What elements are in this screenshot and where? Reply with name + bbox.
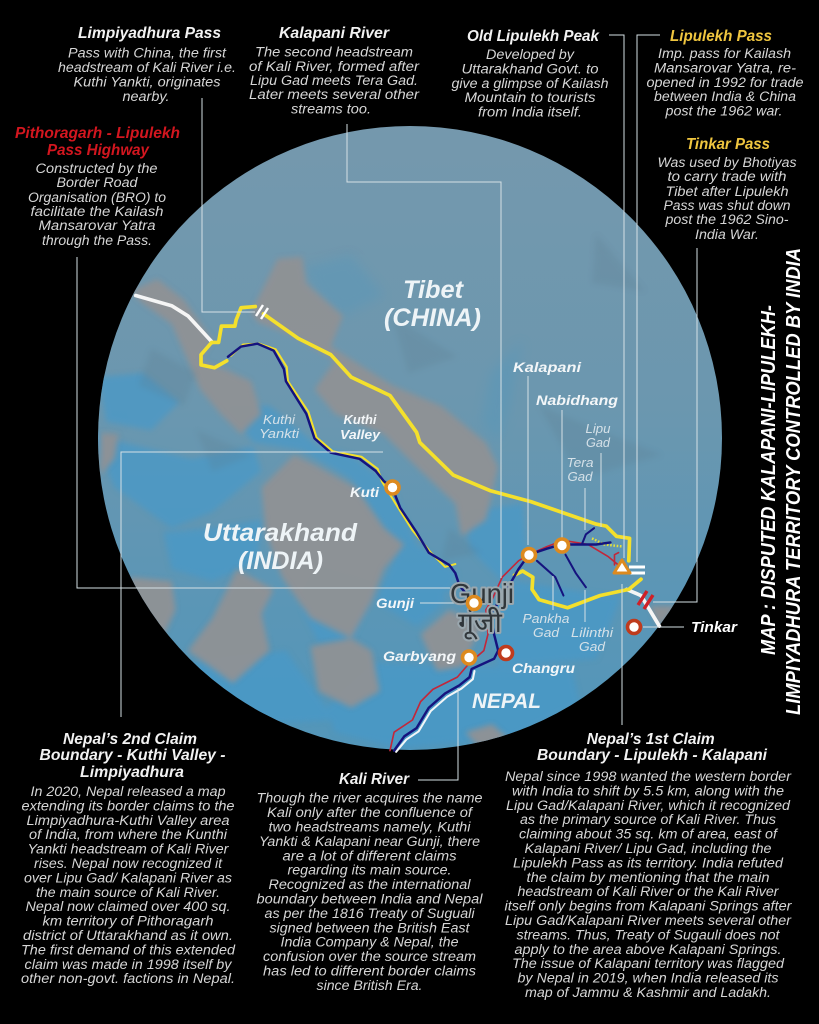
text block: Nepal's 1st claim: Lipu Gad/Kalapani River meets several other <box>505 913 792 928</box>
text block: Pithoragarh - Lipulekh Pass Highway: facilitate the Kailash <box>30 204 164 219</box>
leader: Nepal 1st claim <box>621 584 623 725</box>
text block: Nepal's 1st claim: Lipu Gad/Kalapani River, which it recognized <box>506 798 791 813</box>
text block: Lipulekh Pass: Lipulekh Pass <box>670 28 772 45</box>
text block: Nepal's 1st claim: headstream of Kali River or the Kali River <box>518 884 779 899</box>
map labels <box>203 276 738 713</box>
label: Lilinthi Gad: Lilinthi <box>571 625 614 640</box>
label: Tibet (China): Tibet <box>403 276 465 304</box>
leader: Old Lipulekh Peak <box>609 35 624 558</box>
leader: Pithoragarh highway <box>77 257 450 588</box>
text block: Nepal's 1st claim: itself only begins from Kalapani Springs after <box>504 899 792 914</box>
base map label: Gunji: गूंजी <box>458 606 503 640</box>
leader: Limpiyadhura Pass <box>202 98 255 312</box>
text block: Nepal's 1st claim: with India to shift by 5.5 km, along with the <box>512 783 784 798</box>
marker: Garbyang <box>462 651 476 664</box>
text block: Old Lipulekh Peak: give a glimpse of Kailash <box>452 76 608 91</box>
text block: Kali River: boundary between India and Nepal <box>256 892 484 906</box>
label: Kuthi Yankti: Yankti <box>259 426 300 441</box>
text block: Limpiyadhura Pass: headstream of Kali River i.e. <box>58 60 236 75</box>
label: Garbyang: Garbyang <box>383 648 456 664</box>
leader: Kali River <box>418 688 458 780</box>
text block: Nepal's 2nd claim: Limpiyadhura <box>80 764 184 781</box>
text block: Pithoragarh - Lipulekh Pass Highway: Mansarovar Yatra <box>38 218 156 233</box>
text block: Kali River: regarding its main source. <box>288 863 452 878</box>
base map label: Gunji <box>450 578 514 640</box>
text block: Kali River: has led to different border claims <box>263 964 476 978</box>
text block: Old Lipulekh Peak: Uttarakhand Govt. to <box>462 62 599 76</box>
label: Kuti: Kuti <box>350 484 380 500</box>
text block: Kali River: Though the river acquires the name <box>256 791 482 806</box>
text block: Nepal's 2nd claim: Limpiyadhura-Kuthi Valley area <box>26 813 230 828</box>
text block: Kalapani River: streams too. <box>291 102 371 116</box>
text block: Lipulekh Pass <box>646 28 804 118</box>
marker: Changru <box>500 646 512 660</box>
icon: Lipulekh pass mark <box>629 567 645 573</box>
marker: Gunji <box>468 596 480 610</box>
label: Kuthi Valley: Valley <box>340 427 381 442</box>
text block: Tinkar Pass: Tibet after Lipulekh <box>666 184 788 199</box>
text block: Nepal's 2nd claim: Nepal’s 2nd Claim <box>63 731 197 748</box>
label: Pankha Gad: Pankha <box>522 611 570 626</box>
label: Kuthi Yankti: Kuthi <box>263 412 296 427</box>
text block: Old Lipulekh Peak <box>452 28 608 120</box>
vertical title: LIMPIYADHURA TERRITORY CONTROLLED BY INDIA <box>783 248 805 715</box>
text block: Nepal's 2nd claim: other non-govt. factions in Nepal. <box>21 971 235 986</box>
text block: Nepal's 2nd claim: rises. Nepal now recognized it <box>34 856 223 871</box>
text block: Nepal's 2nd claim: In 2020, Nepal released a map <box>30 784 226 799</box>
label: Tibet (China) <box>384 276 481 332</box>
icon: Tinkar pass mark <box>638 591 653 609</box>
text block: Tinkar Pass: Pass was shut down <box>664 198 790 213</box>
text block: Lipulekh Pass: between India & China <box>654 89 797 104</box>
label: Gunji: Gunji <box>376 595 415 611</box>
text block: Nepal's 2nd claim: extending its border claims to the <box>22 798 234 813</box>
text block: Tinkar Pass: Tinkar Pass <box>686 136 770 153</box>
text block: Nepal's 2nd claim: Yankti headstream of Kali River <box>28 842 229 857</box>
highway: yellow boundary to Lipulekh <box>263 314 630 561</box>
label: Uttarakhand (India) <box>203 519 358 575</box>
text block: Old Lipulekh Peak: Developed by <box>486 47 575 62</box>
text block: Old Lipulekh Peak: Mountain to tourists <box>464 90 596 105</box>
marker: Old Lipulekh Peak <box>614 560 630 573</box>
text block: Limpiyadhura Pass: Pass with China, the first <box>68 46 227 60</box>
label: Changru: Changru <box>512 660 575 676</box>
river: Kali main stem <box>394 542 610 751</box>
leader: Lipulekh Pass <box>637 35 660 562</box>
text block: Kali River: signed between the British East <box>270 920 471 935</box>
text block: Kali River: Yankti & Kalapani near Gunji, there <box>259 834 480 849</box>
icon: Limpiyadhura pass mark <box>256 305 268 319</box>
text block: Kali River: as per the 1816 Treaty of Suguali <box>264 906 476 921</box>
label: Tinkar: Tinkar <box>691 619 738 636</box>
text block: Kalapani River: The second headstream <box>255 44 413 60</box>
text block: Nepal's 1st claim: Lipulekh Pass as its territory. India refuted <box>513 855 784 870</box>
text block: Kali River: since British Era. <box>316 978 422 993</box>
text block: Old Lipulekh Peak: Old Lipulekh Peak <box>467 28 600 45</box>
label: Lilinthi Gad <box>571 625 614 654</box>
river: red hook <box>614 553 619 565</box>
trail: dashed yellow <box>592 538 623 547</box>
text block: Pithoragarh - Lipulekh Pass Highway: Constructed by the <box>36 161 158 176</box>
label: Kuthi Valley: Kuthi <box>344 412 377 427</box>
text block: Nepal's 1st claim: Boundary - Lipulekh - Kalapani <box>537 747 768 764</box>
text block: Nepal's 1st claim: apply to the area above Kalapani Springs. <box>514 942 782 957</box>
label: Pankha Gad <box>522 611 570 640</box>
text block: Kali River: are a lot of different claims <box>282 848 457 863</box>
text block: Tinkar Pass: post the 1962 Sino- <box>664 212 789 227</box>
text block: Nepal's 2nd claim: km territory of Pithoragarh <box>42 914 213 929</box>
river: Pankha Gad <box>537 561 563 596</box>
vertical title <box>758 248 805 715</box>
text block: Pithoragarh - Lipulekh Pass Highway: Border Road <box>56 175 138 190</box>
leader: Nabidhang <box>561 410 563 538</box>
text block: Nepal's 1st claim: Nepal’s 1st Claim <box>587 731 715 748</box>
text block: Pithoragarh - Lipulekh Pass Highway: Pithoragarh - Lipulekh <box>15 125 180 142</box>
text block: Kali River: two headstreams namely, Kuthi <box>268 820 472 834</box>
text block: Nepal's 1st claim <box>504 731 792 1000</box>
text block: Lipulekh Pass: post the 1962 war. <box>664 104 782 118</box>
text block: Nepal's 1st claim: as the primary source of Kali River. Thus <box>520 812 776 827</box>
text block: Nepal's 1st claim: the claim by mentioning that the main <box>526 870 770 885</box>
highway: loop near Lipulekh to Kalapani <box>514 571 641 608</box>
text block: Lipulekh Pass: Imp. pass for Kailash <box>658 46 791 61</box>
road: white approach road to Limpiyadhura <box>136 296 212 342</box>
leader: Tinkar Pass <box>653 248 697 602</box>
text block: Kali River: India Company & Nepal, the <box>280 935 458 950</box>
leader: Kalapani River <box>347 124 501 578</box>
river: Lilinthi Gad <box>566 555 586 587</box>
text block: Nepal's 2nd claim: of India, from where the Kunthi <box>29 827 228 842</box>
text block: Nepal's 2nd claim: Boundary - Kuthi Valley - <box>40 747 226 764</box>
river halo: white edge on Kali River <box>396 671 474 752</box>
river: Kuthi Yankti <box>228 344 474 604</box>
text block: Old Lipulekh Peak: from India itself. <box>478 104 582 120</box>
leader: Nepal 2nd claim <box>121 452 383 717</box>
leader: Lilinthi Gad <box>584 590 586 622</box>
text block: Nepal's 2nd claim: claim was made in 1998 itself by <box>24 957 233 972</box>
text block: Kali River: Kali only after the confluence of <box>267 805 473 820</box>
text block: Kalapani River <box>249 25 420 116</box>
text block: Nepal's 2nd claim: Nepal now claimed over 400 sq. <box>26 899 230 914</box>
text block: Tinkar Pass: Was used by Bhotiyas <box>658 155 797 170</box>
text block: Nepal's 1st claim: Kalapani River/ Lipu Gad, including the <box>524 841 772 856</box>
label: Kuthi Valley <box>340 412 381 442</box>
text block: Nepal's 2nd claim: over Lipu Gad/ Kalapani River as <box>24 870 232 885</box>
label: Lipu Gad: Gad <box>586 435 611 450</box>
label: Lipu Gad: Lipu <box>586 421 610 436</box>
text block: Kali River: Recognized as the international <box>268 877 472 892</box>
map: circular terrain base <box>90 120 730 760</box>
marker: Kalapani <box>522 548 536 562</box>
leader: Pankha Gad <box>552 576 554 610</box>
leader: Tera Gad <box>584 488 586 530</box>
text block: Nepal's 1st claim: by Nepal in 2019, when India released its <box>518 971 779 986</box>
text block: Kalapani River: of Kali River, formed after <box>249 59 420 74</box>
text block: Kalapani River: Lipu Gad meets Tera Gad. <box>250 73 418 88</box>
text block: Nepal's 1st claim: streams. Thus, Treaty of Sugauli does not <box>516 927 781 942</box>
leader: Gunji <box>420 602 465 604</box>
label: Nepal: NEPAL <box>472 690 541 713</box>
leader: Kalapani <box>527 376 529 545</box>
boundary: thin yellow along Kuthi Yankti <box>231 344 455 567</box>
text block: Limpiyadhura Pass: nearby. <box>122 89 170 104</box>
label: Tera Gad <box>566 455 594 484</box>
label: Tibet (China): (CHINA) <box>384 304 481 332</box>
road: white road near Tinkar <box>627 589 659 626</box>
markers <box>386 481 640 664</box>
text block: Nepal's 1st claim: Nepal since 1998 wanted the western border <box>505 769 792 784</box>
text block: Nepal's 2nd claim: district of Uttarakhand as it own. <box>23 928 233 943</box>
text block: Tinkar Pass <box>658 136 797 242</box>
text block: Nepal's 2nd claim <box>21 731 236 986</box>
text block: Nepal's 2nd claim: The first demand of this extended <box>21 942 236 957</box>
leader lines <box>77 35 697 780</box>
text block: Nepal's 1st claim: claiming about 35 sq. km of area, east of <box>519 827 778 842</box>
text block: Pithoragarh - Lipulekh Pass Highway: Pass Highway <box>47 142 150 159</box>
leader: Tinkar <box>643 626 684 628</box>
text block: Limpiyadhura Pass <box>58 25 236 104</box>
text block: Kali River <box>256 771 484 993</box>
marker: Tinkar <box>628 620 640 634</box>
label: Nabidhang: Nabidhang <box>536 392 618 408</box>
text block: Limpiyadhura Pass: Limpiyadhura Pass <box>78 25 221 42</box>
label: Tera Gad: Tera <box>566 455 594 470</box>
label: Kuthi Yankti <box>259 412 300 441</box>
text block: Nepal's 1st claim: The issue of Kalapani territory was flagged <box>512 956 785 971</box>
river: red stream <box>390 540 621 751</box>
text block: Lipulekh Pass: Mansarovar Yatra, re- <box>654 60 797 76</box>
label: Pankha Gad: Gad <box>533 625 560 640</box>
text block: Kali River: confusion over the source stream <box>263 949 476 964</box>
text block: Tinkar Pass: to carry trade with <box>668 169 786 184</box>
label: Lilinthi Gad: Gad <box>579 639 606 654</box>
text block: Lipulekh Pass: opened in 1992 for trade <box>646 75 804 90</box>
label: Kalapani: Kalapani <box>513 359 582 375</box>
text block: Nepal's 1st claim: map of Jammu & Kashmir and Ladakh. <box>525 985 771 1000</box>
river: Lipu Gad <box>582 528 594 544</box>
marker: Nabidhang <box>556 539 568 552</box>
text block: Kalapani River: Later meets several other <box>249 87 420 102</box>
text block: Kalapani River: Kalapani River <box>279 25 390 42</box>
text block: Tinkar Pass: India War. <box>695 227 759 242</box>
text block: Kali River: Kali River <box>339 771 410 788</box>
label: Uttarakhand (India): Uttarakhand <box>203 519 358 547</box>
label: Lipu Gad <box>586 421 611 450</box>
highway: Nepal claim boundary west <box>201 307 255 368</box>
text block: Pithoragarh - Lipulekh Pass Highway <box>15 125 180 248</box>
base map label: Gunji: Gunji <box>450 578 514 609</box>
map: routes and rivers <box>136 296 659 752</box>
label: Tera Gad: Gad <box>568 469 593 484</box>
text block: Pithoragarh - Lipulekh Pass Highway: through the Pass. <box>42 233 152 248</box>
marker: Kuti <box>386 481 399 494</box>
text block: Pithoragarh - Lipulekh Pass Highway: Organisation (BRO) to <box>28 190 166 205</box>
text block: Limpiyadhura Pass: Kuthi Yankti, originates <box>74 74 221 90</box>
label: Uttarakhand (India): (INDIA) <box>238 547 323 575</box>
leader: Lipu Gad <box>600 453 602 527</box>
text block: Nepal's 2nd claim: the main source of Kali River. <box>36 885 220 900</box>
vertical title: MAP : DISPUTED KALAPANI-LIPULEKH- <box>758 305 780 655</box>
